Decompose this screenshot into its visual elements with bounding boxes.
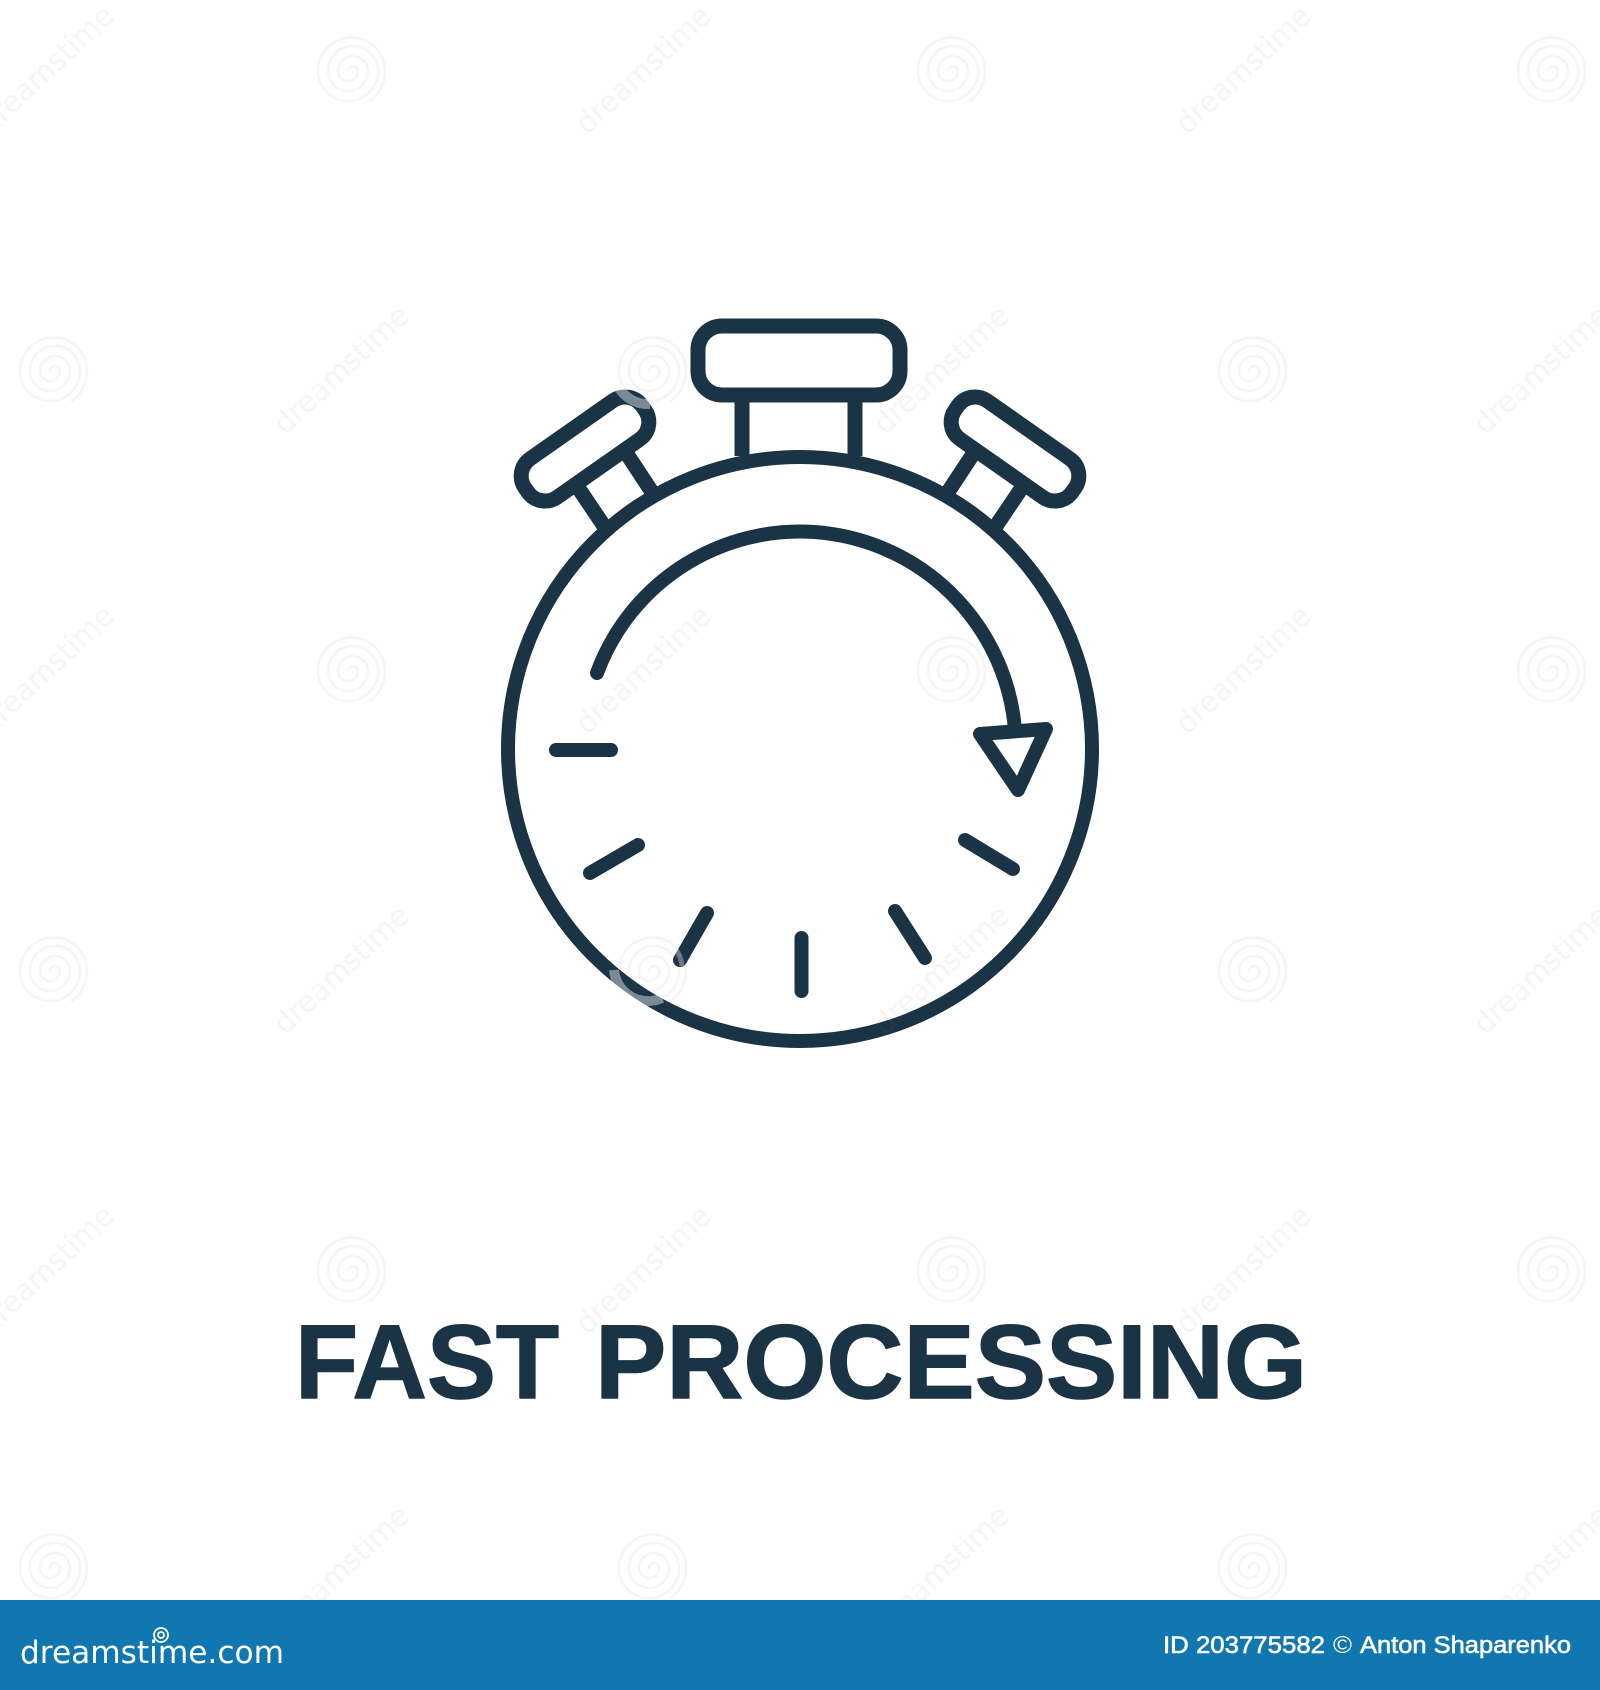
icon: stopwatch	[508, 326, 1092, 1041]
footer credit: ©	[1333, 1632, 1352, 1659]
dial ticks	[556, 750, 1013, 991]
title: PROCESSING	[595, 1304, 1307, 1421]
footer credit: ID 203775582	[1163, 1632, 1325, 1659]
top button	[698, 326, 900, 456]
footer bar	[0, 1600, 1600, 1690]
left button	[513, 389, 657, 526]
icon: logo spiral	[154, 1628, 168, 1642]
arrow: rotation arc	[597, 532, 1046, 790]
footer credit: Anton Shaparenko	[1360, 1632, 1571, 1659]
right button	[943, 389, 1087, 526]
title	[295, 1304, 1307, 1421]
footer logo: dreamstime.com: dreamstime.com	[20, 1635, 284, 1671]
footer credit	[1163, 1632, 1571, 1659]
title: FAST	[295, 1304, 559, 1421]
stopwatch body	[508, 457, 1092, 1041]
